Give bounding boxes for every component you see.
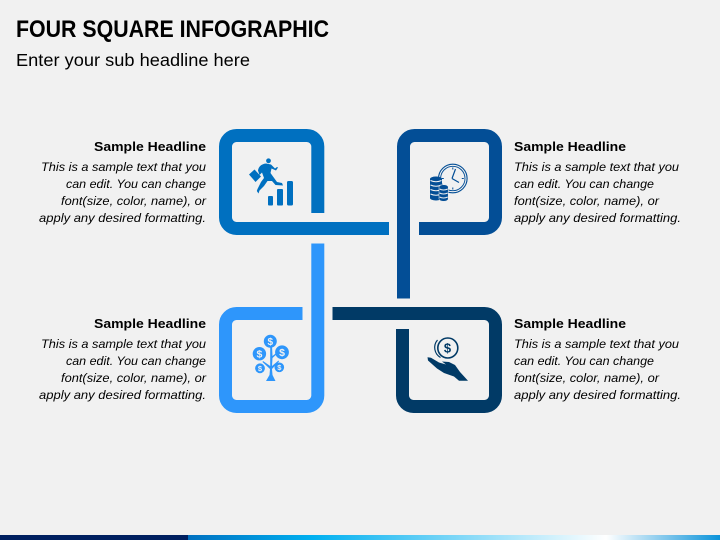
- text block: top-right: Sample Headline: [514, 139, 626, 154]
- icon: clock and coins: [430, 164, 467, 201]
- text block: bottom-right: font(size, color, name), or: [514, 371, 660, 385]
- footer gradient bar: [0, 535, 720, 540]
- text block: bottom-left: Sample Headline: [94, 316, 206, 331]
- text block: bottom-left: This is a sample text that you: [41, 337, 206, 351]
- text block: top-left: This is a sample text that you: [41, 160, 206, 174]
- text block: top-left: can edit. You can change: [66, 177, 206, 191]
- icon: money tree: $: [258, 364, 263, 373]
- text block: bottom-right: apply any desired formatting.: [514, 388, 681, 402]
- text block: top-right: can edit. You can change: [514, 177, 654, 191]
- text block: bottom-right: [514, 316, 681, 402]
- icon: hand holding coin: $: [444, 340, 452, 356]
- text block: bottom-left: apply any desired formatting.: [39, 388, 206, 402]
- text block: bottom-left: can edit. You can change: [66, 354, 206, 368]
- title: FOUR SQUARE INFOGRAPHIC: [16, 16, 329, 43]
- text block: bottom-right: Sample Headline: [514, 316, 626, 331]
- text block: bottom-right: This is a sample text that you: [514, 337, 679, 351]
- panel: top-left square: [226, 136, 389, 228]
- text block: bottom-left: font(size, color, name), or: [61, 371, 207, 385]
- text block: bottom-left: [39, 316, 207, 402]
- subtitle: Enter your sub headline here: [16, 50, 250, 70]
- panel: bottom-right square: [332, 314, 496, 406]
- text block: top-right: [514, 139, 681, 225]
- text block: top-left: apply any desired formatting.: [39, 211, 206, 225]
- icon: hand holding coin: [428, 338, 468, 381]
- icon: runner climbing bar chart: [249, 158, 293, 206]
- text block: top-right: font(size, color, name), or: [514, 194, 660, 208]
- text block: top-left: [39, 139, 207, 225]
- icon: money tree: $: [277, 363, 282, 372]
- icon: money tree: $: [279, 347, 285, 359]
- icon: money tree: [253, 335, 289, 381]
- text block: top-right: apply any desired formatting.: [514, 211, 681, 225]
- icon: money tree: $: [256, 348, 262, 360]
- panel: top-right square: [404, 136, 496, 298]
- text block: top-left: font(size, color, name), or: [61, 194, 207, 208]
- text block: top-left: Sample Headline: [94, 139, 206, 154]
- panel: bottom-left square: [226, 244, 318, 406]
- icon: money tree: $: [268, 337, 274, 348]
- text block: bottom-right: can edit. You can change: [514, 354, 654, 368]
- text block: top-right: This is a sample text that you: [514, 160, 679, 174]
